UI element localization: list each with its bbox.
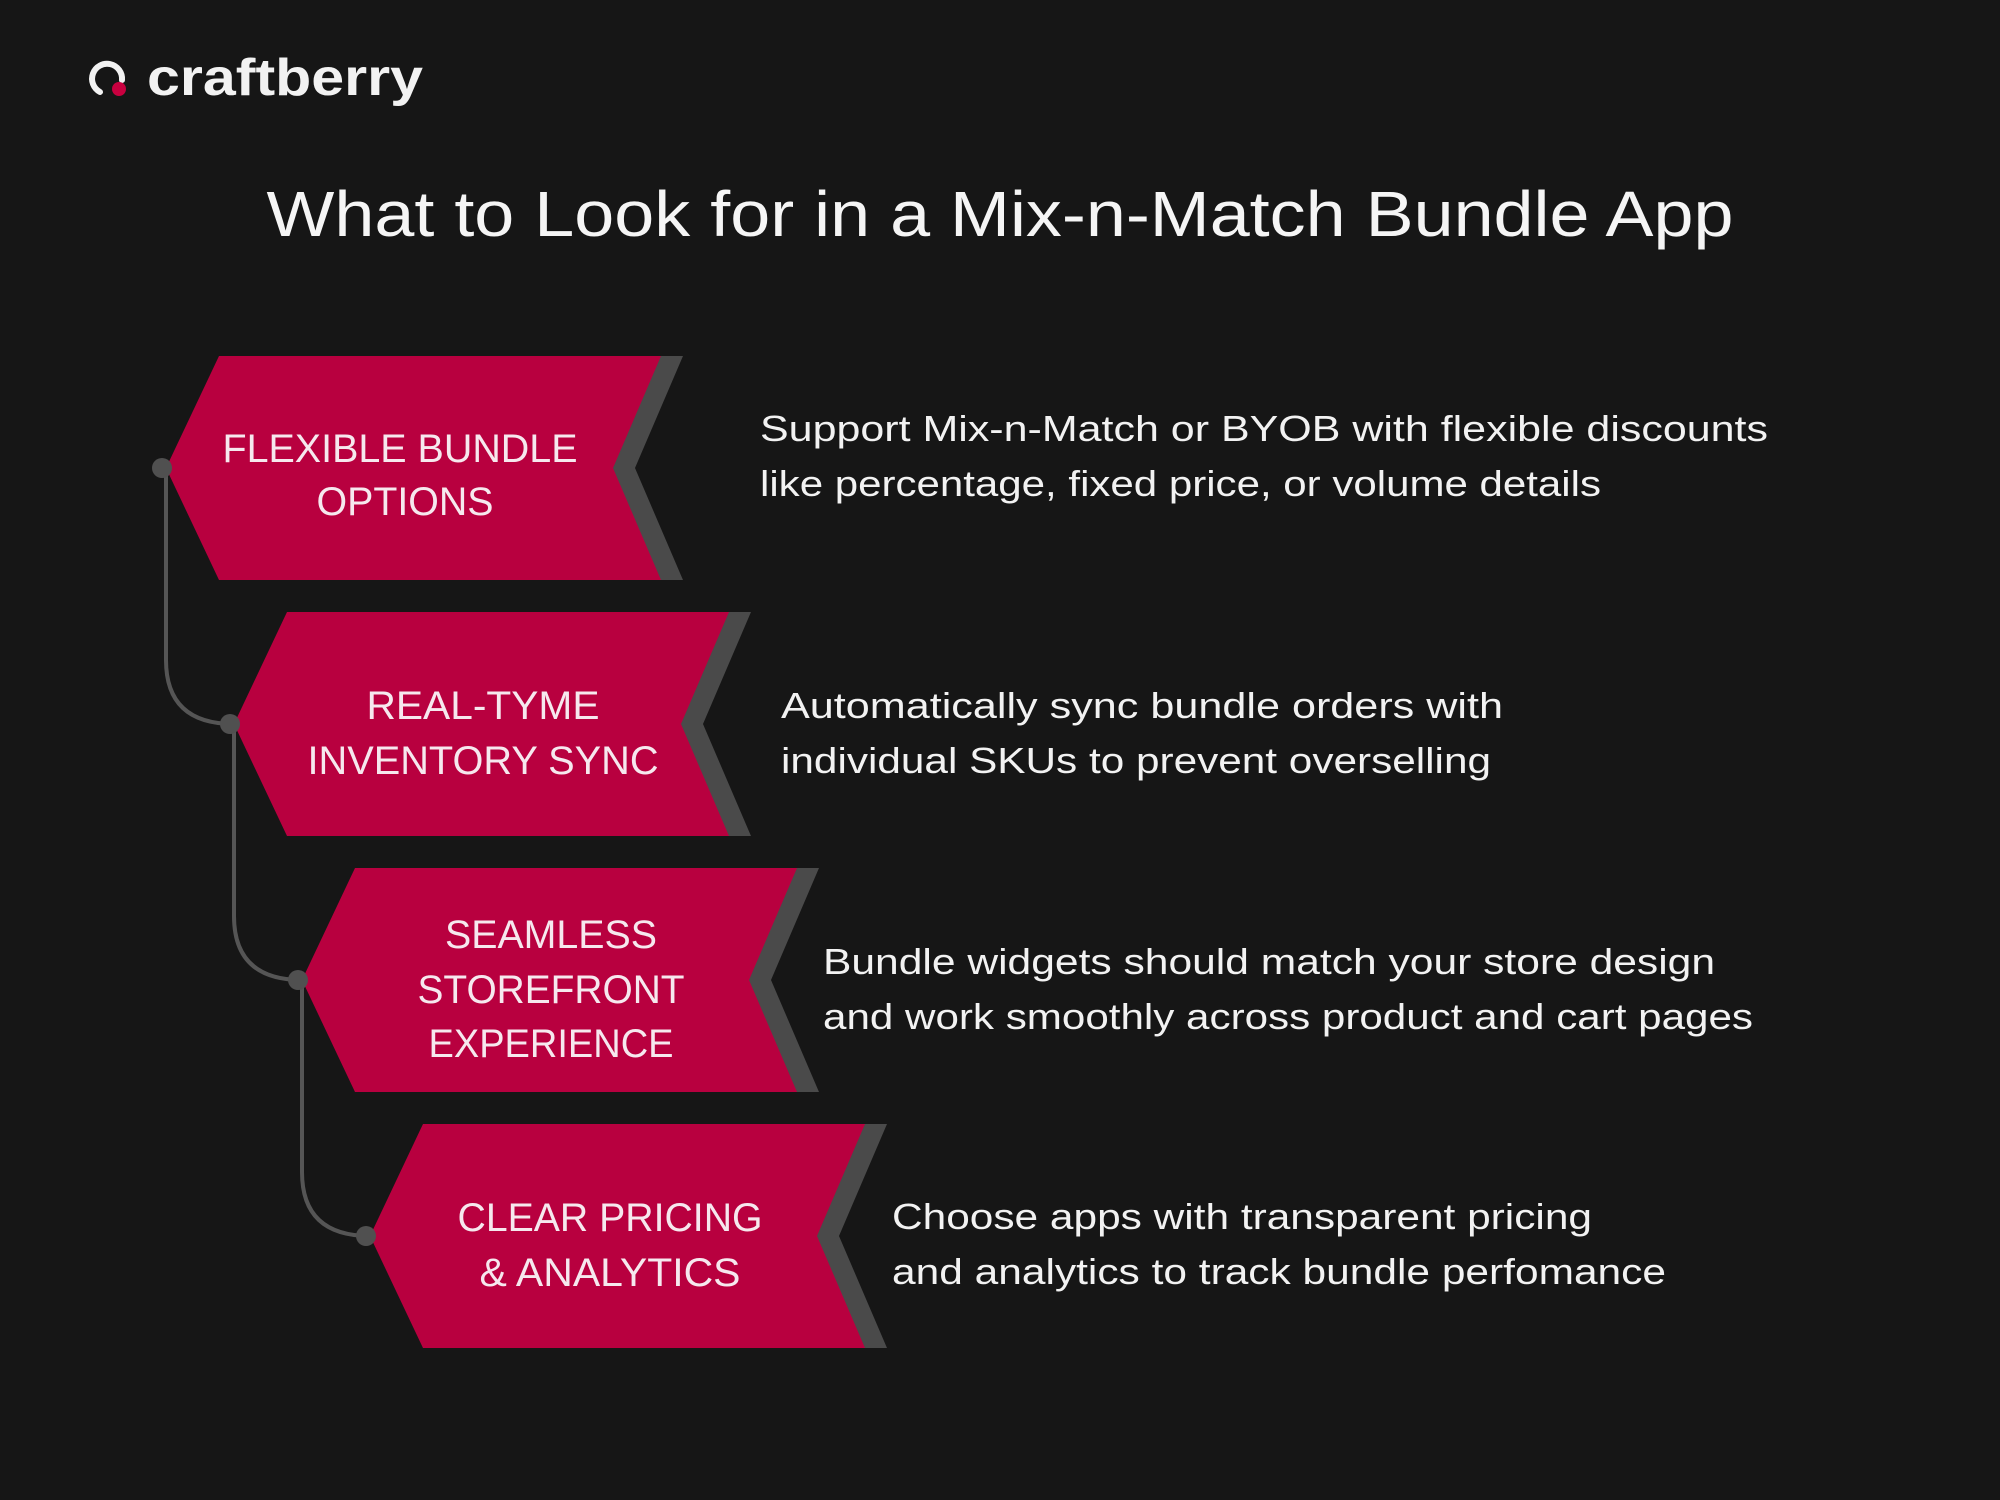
panel: clear pricing & analytics bbox=[356, 1124, 887, 1348]
panel: flexible bundle options bbox=[152, 356, 683, 580]
text block: inventory description: individual SKUs to prevent overselling bbox=[781, 740, 1491, 781]
text block: inventory description: Automatically sync bundle orders with bbox=[781, 685, 1503, 726]
text block: flexible bundle description: Support Mix-n-Match or BYOB with flexible discounts bbox=[760, 408, 1768, 449]
panel: flexible bundle options: OPTIONS bbox=[316, 480, 494, 524]
panel: clear pricing & analytics: CLEAR PRICING bbox=[458, 1196, 762, 1240]
text block: storefront description: and work smoothly across product and cart pages bbox=[823, 996, 1753, 1037]
text block: flexible bundle description bbox=[760, 408, 1768, 504]
panel: real-tyme inventory sync: REAL-TYME bbox=[366, 684, 600, 728]
panel: seamless storefront experience: EXPERIENCE bbox=[428, 1022, 674, 1066]
text block: storefront description: Bundle widgets should match your store design bbox=[823, 941, 1715, 982]
logo bbox=[92, 49, 423, 107]
panel: seamless storefront experience bbox=[288, 868, 819, 1092]
panel: real-tyme inventory sync bbox=[220, 612, 751, 836]
panel: real-tyme inventory sync: INVENTORY SYNC bbox=[308, 739, 658, 783]
panel: seamless storefront experience: SEAMLESS bbox=[445, 913, 657, 957]
text block: pricing description: Choose apps with transparent pricing bbox=[892, 1196, 1592, 1237]
panel: clear pricing & analytics: & ANALYTICS bbox=[480, 1251, 740, 1295]
text block: pricing description: and analytics to track bundle perfomance bbox=[892, 1251, 1666, 1292]
text block: flexible bundle description: like percentage, fixed price, or volume details bbox=[760, 463, 1601, 504]
logo text: craftberry bbox=[147, 49, 423, 107]
connector line bbox=[166, 468, 370, 1236]
text block: inventory description bbox=[781, 685, 1503, 781]
text block: storefront description bbox=[823, 941, 1753, 1037]
title: What to Look for in a Mix-n-Match Bundle App bbox=[266, 178, 1734, 250]
text block: pricing description bbox=[892, 1196, 1666, 1292]
panel: flexible bundle options: FLEXIBLE BUNDLE bbox=[222, 427, 578, 471]
icon: logo ring bbox=[92, 64, 126, 96]
panel: seamless storefront experience: STOREFRONT bbox=[418, 968, 684, 1012]
